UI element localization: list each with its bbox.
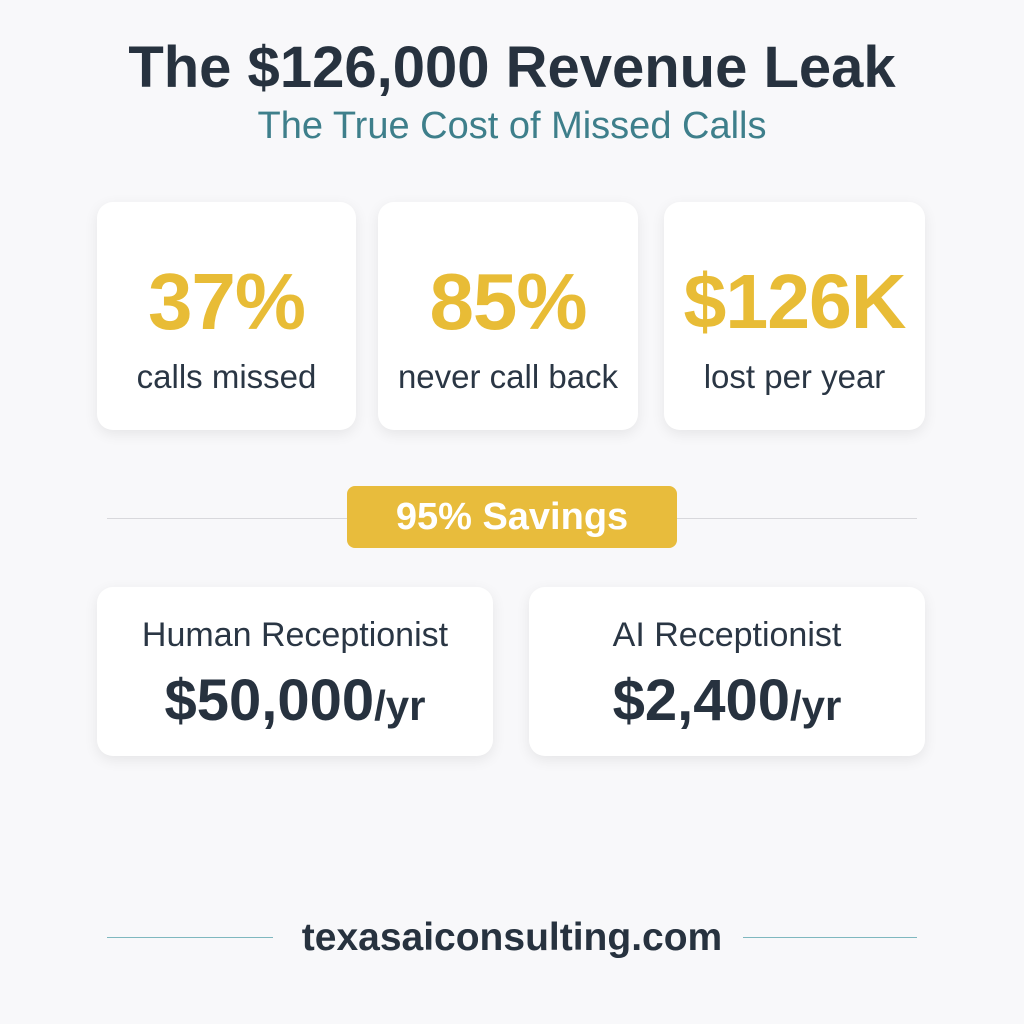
panel: stat never call back: 85% <box>429 257 587 346</box>
panel: AI receptionist: $2,400/yr <box>613 668 841 733</box>
panel: AI receptionist <box>529 587 925 756</box>
panel: stat lost per year <box>664 202 925 430</box>
panel: stat calls missed <box>97 202 356 430</box>
panel: human receptionist: Human Receptionist <box>142 616 448 654</box>
panel: stat lost per year: $126K <box>684 259 905 345</box>
panel: stat lost per year: lost per year <box>704 358 885 395</box>
footer url: texasaiconsulting.com <box>302 916 722 959</box>
panel: AI receptionist: AI Receptionist <box>613 616 841 654</box>
badge: savings: 95% Savings <box>396 496 628 538</box>
panel: stat never call back: never call back <box>398 358 618 395</box>
badge: savings <box>347 486 677 548</box>
panel: human receptionist: $50,000/yr <box>164 668 426 733</box>
panel: stat never call back <box>378 202 638 430</box>
panel: human receptionist <box>97 587 493 756</box>
title: The $126,000 Revenue Leak <box>128 35 896 100</box>
panel: stat calls missed: 37% <box>148 257 305 346</box>
subtitle: The True Cost of Missed Calls <box>258 105 766 147</box>
panel: stat calls missed: calls missed <box>137 358 316 395</box>
